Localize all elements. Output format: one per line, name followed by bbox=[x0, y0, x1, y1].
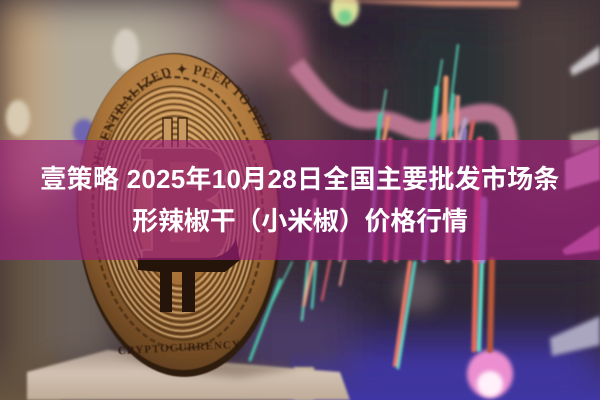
title: 壹策略 2025年10月28日全国主要批发市场条 bbox=[40, 164, 560, 194]
bitcoin coin: CRYPTOCURRENCY bbox=[118, 339, 240, 357]
bitcoin coin bbox=[76, 52, 282, 378]
bitcoin symbol bbox=[138, 118, 240, 312]
chart streaks under banner bbox=[310, 130, 600, 260]
banner strip bbox=[0, 140, 600, 260]
stone pedestal bbox=[27, 350, 350, 400]
pink chart wave bbox=[296, 64, 509, 170]
candlestick chart streaks bbox=[250, 45, 492, 368]
coin rim lettering: DECENTRALIZED ✦ PEER TO PEER bbox=[91, 64, 272, 170]
concentric rings bbox=[86, 73, 270, 353]
title: 形辣椒干（小米椒）价格行情 bbox=[132, 206, 468, 236]
title bbox=[40, 164, 560, 236]
